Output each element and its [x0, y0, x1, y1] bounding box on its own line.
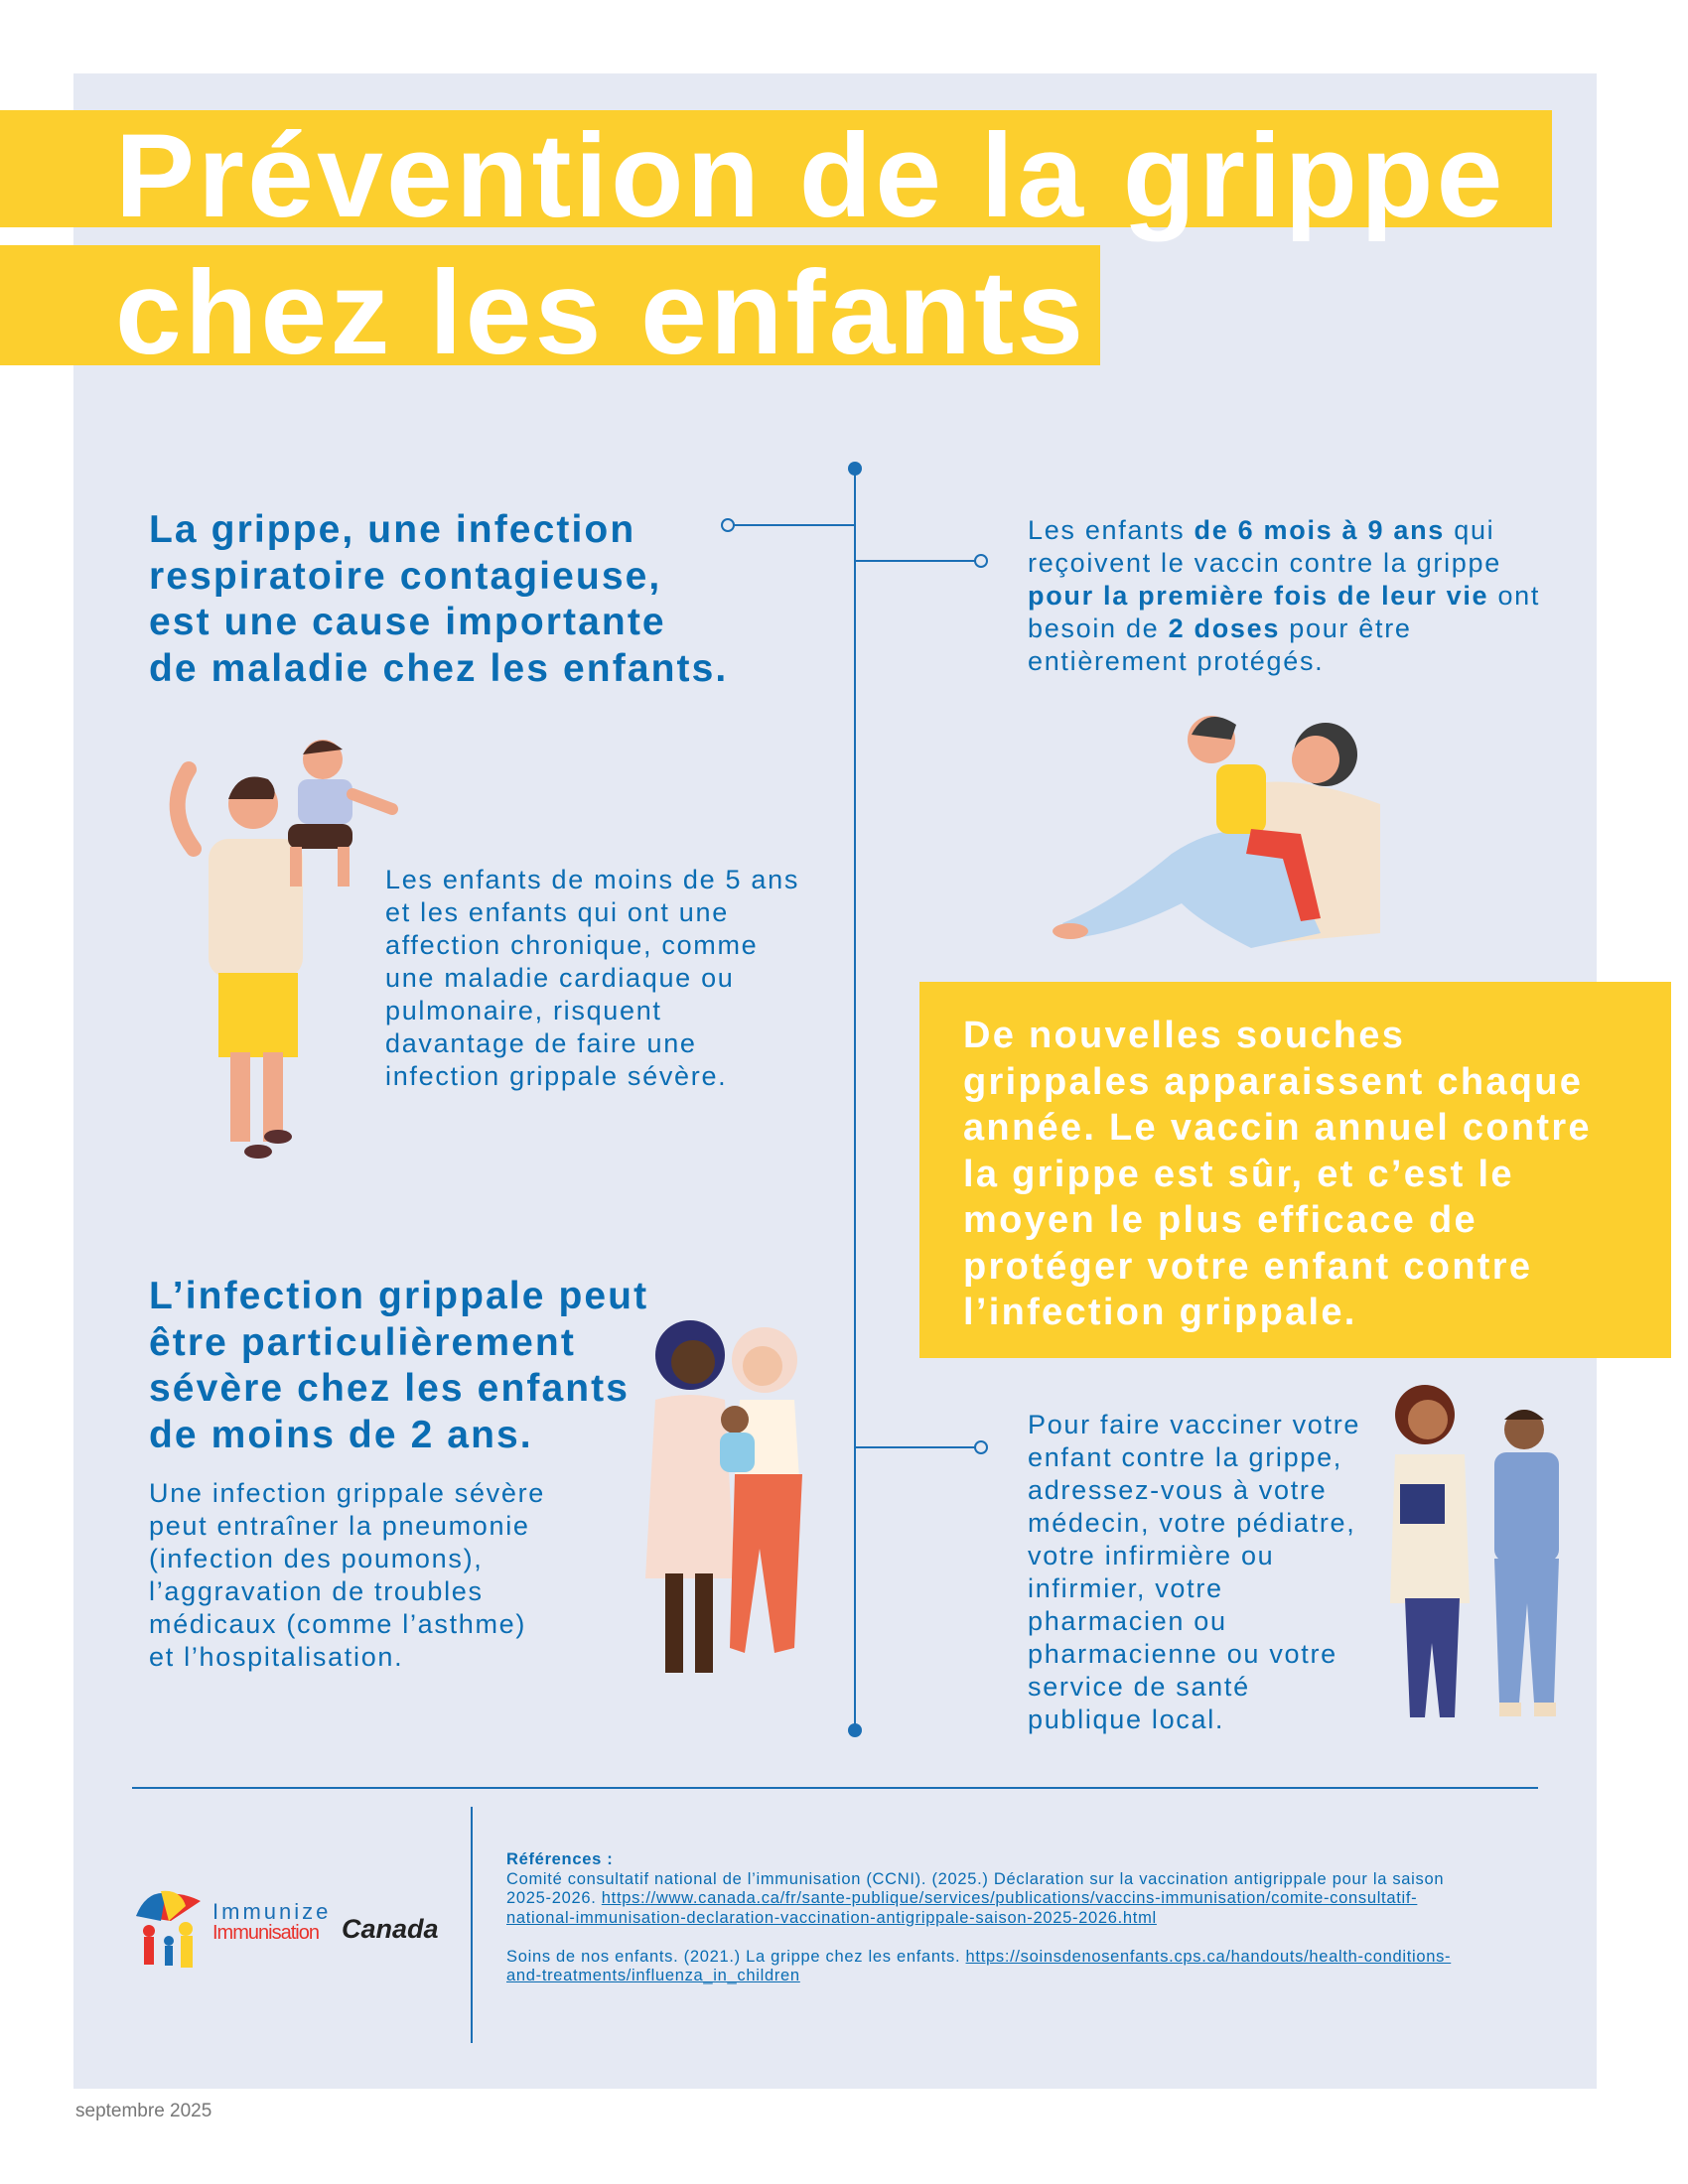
callout: annual vaccine: protéger votre enfant contre	[963, 1245, 1532, 1287]
text: where to get vaccinated: adressez-vous à votre	[1028, 1475, 1327, 1505]
title	[0, 109, 1552, 379]
heading: contagious infection: respiratoire contagieuse,	[149, 554, 661, 598]
title: chez les enfants	[115, 246, 1086, 379]
callout: annual vaccine: moyen le plus efficace de	[963, 1199, 1477, 1241]
text: where to get vaccinated: infirmier, votre	[1028, 1573, 1223, 1603]
footer divider	[132, 1787, 1538, 1789]
text: where to get vaccinated: votre infirmière ou	[1028, 1541, 1274, 1570]
text: severe infection consequences: l’aggravation de troubles	[149, 1576, 484, 1606]
text: 6 months to 9 years	[1028, 515, 1540, 676]
callout: annual vaccine: année. Le vaccin annuel contre	[963, 1107, 1592, 1149]
references: national-immunisation-declaration-vaccination-antigrippale-saison-2025-2026.html	[506, 1908, 1157, 1926]
text: 6 months to 9 years: pour la première fois de leur vie ont	[1028, 581, 1540, 611]
heading: contagious infection: est une cause importante	[149, 601, 666, 643]
illustration: health professionals	[1390, 1385, 1559, 1717]
logo: Immunize Canada	[136, 1890, 439, 1968]
text: where to get vaccinated: enfant contre la grippe,	[1028, 1442, 1342, 1472]
text: children under 5: une maladie cardiaque ou	[385, 963, 735, 993]
text: 6 months to 9 years: entièrement protégés.	[1028, 646, 1324, 676]
callout: annual vaccine: l’infection grippale.	[963, 1292, 1357, 1333]
text: 6 months to 9 years: besoin de 2 doses pour être	[1028, 614, 1412, 643]
references: and-treatments/influenza_in_children	[506, 1967, 800, 1984]
heading: under 2 years: de moins de 2 ans.	[149, 1414, 533, 1455]
text: where to get vaccinated: publique local.	[1028, 1705, 1224, 1734]
text: severe infection consequences: médicaux (comme l’asthme)	[149, 1609, 526, 1639]
text: 6 months to 9 years: Les enfants de 6 mois à 9 ans qui	[1028, 515, 1494, 545]
heading: under 2 years	[149, 1275, 648, 1455]
callout: annual vaccine: la grippe est sûr, et c’est le	[963, 1154, 1514, 1195]
date: septembre 2025	[75, 2101, 211, 2121]
callout: annual vaccine: De nouvelles souches	[963, 1015, 1405, 1056]
illustration: two mothers with baby	[645, 1320, 802, 1673]
heading: under 2 years: être particulièrement	[149, 1320, 576, 1364]
text: children under 5: Les enfants de moins de 5 ans	[385, 865, 799, 894]
references	[506, 1850, 1452, 1984]
text: severe infection consequences: peut entraîner la pneumonie	[149, 1511, 530, 1541]
heading: contagious infection: La grippe, une infection	[149, 508, 635, 551]
text: severe infection consequences	[149, 1478, 545, 1672]
heading: contagious infection: de maladie chez les enfants.	[149, 647, 728, 689]
text: children under 5	[385, 865, 799, 1091]
text: where to get vaccinated: pharmacienne ou votre	[1028, 1639, 1337, 1669]
text: where to get vaccinated	[1028, 1410, 1360, 1734]
logo: Immunize Canada: Immunize	[212, 1899, 331, 1924]
callout: annual vaccine	[919, 982, 1671, 1358]
text: where to get vaccinated: pharmacien ou	[1028, 1606, 1227, 1636]
references: Comité consultatif national de l’immunisation (CCNI). (2025.) Déclaration sur la vaccination antigrippale pour la saison	[506, 1870, 1444, 1888]
illustration: mother and daughter	[1053, 716, 1380, 948]
text: children under 5: davantage de faire une	[385, 1028, 697, 1058]
text: children under 5: affection chronique, comme	[385, 930, 758, 960]
text: children under 5: et les enfants qui ont une	[385, 897, 729, 927]
text: severe infection consequences: (infection des poumons),	[149, 1544, 483, 1573]
logo: Immunize Canada: Canada	[342, 1914, 439, 1944]
text: where to get vaccinated: Pour faire vacciner votre	[1028, 1410, 1360, 1439]
callout: annual vaccine: grippales apparaissent chaque	[963, 1060, 1583, 1102]
text: severe infection consequences: et l’hospitalisation.	[149, 1642, 403, 1672]
text: where to get vaccinated: médecin, votre pédiatre,	[1028, 1508, 1355, 1538]
references: Soins de nos enfants. (2021.) La grippe chez les enfants. https://soinsdenosenfants.cps.ca/handouts/health-conditions-	[506, 1948, 1451, 1966]
text: severe infection consequences: Une infection grippale sévère	[149, 1478, 545, 1508]
heading: under 2 years: L’infection grippale peut	[149, 1275, 648, 1317]
title: Prévention de la grippe	[115, 109, 1506, 242]
text: where to get vaccinated: service de santé	[1028, 1672, 1250, 1702]
references: Références :	[506, 1850, 613, 1868]
heading: under 2 years: sévère chez les enfants	[149, 1367, 630, 1410]
heading: contagious infection	[149, 508, 728, 689]
references: 2025-2026. https://www.canada.ca/fr/sante-publique/services/publications/vaccins-immunisation/comite-consultatif-	[506, 1889, 1417, 1907]
text: 6 months to 9 years: reçoivent le vaccin contre la grippe	[1028, 548, 1501, 578]
text: children under 5: pulmonaire, risquent	[385, 996, 662, 1025]
illustration: father and child	[169, 740, 398, 1159]
logo: Immunize Canada: Immunisation	[212, 1922, 319, 1944]
text: children under 5: infection grippale sévère.	[385, 1061, 727, 1091]
